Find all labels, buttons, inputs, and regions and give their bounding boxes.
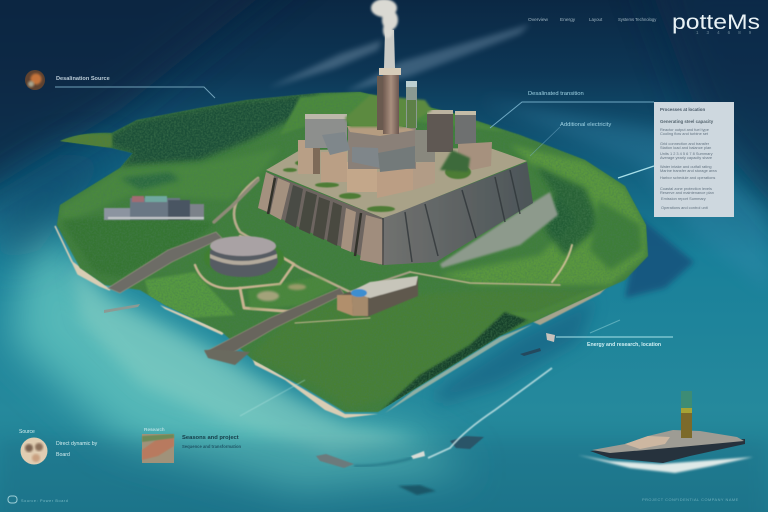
- panel text block: Units 1 2 3 4 5 6 7 8 Summary: [660, 151, 713, 156]
- callout: upper left: [25, 70, 110, 90]
- plant base wall right: [383, 162, 533, 265]
- deck greenery: [283, 160, 471, 212]
- panel text block: [660, 119, 717, 210]
- panel text block: Station load and balance plan: [660, 145, 711, 150]
- callout: lower left picture card: Sequence and transformation: [182, 444, 242, 449]
- callout: upper right labels: Additional electricity: [560, 122, 611, 128]
- island landmass: [57, 92, 648, 412]
- main power plant: [258, 0, 558, 268]
- panel text block: Water intake and outfall rating: [660, 164, 712, 169]
- icon: portrait circle: [20, 438, 48, 464]
- callout: lower left portrait: Direct dynamic by: [56, 441, 98, 447]
- panel text block: Average yearly capacity share: [660, 155, 712, 160]
- top navigation labels: [528, 17, 657, 23]
- bridge causeways: [108, 232, 222, 293]
- callout: lower left portrait: Board: [56, 452, 70, 458]
- ship tower: [681, 391, 692, 413]
- footer credit right: PROJECT CONFIDENTIAL COMPANY NAME: [642, 497, 739, 502]
- west meadow: [63, 218, 209, 276]
- footer left credit: [8, 496, 68, 503]
- ship with tower: [578, 391, 753, 473]
- ship hull: [590, 439, 745, 463]
- top navigation labels: Layout: [589, 17, 603, 22]
- footer left credit: Source: Power Board: [21, 499, 68, 503]
- lower forest: [250, 290, 590, 408]
- title: potteMs: [672, 11, 760, 34]
- coastal sand: [55, 226, 607, 418]
- callout: sea label: Energy and research, location: [587, 342, 661, 348]
- callout: upper right labels: [528, 91, 611, 128]
- plant deck: [266, 148, 527, 218]
- callout: upper left: Desalination Source: [56, 76, 110, 82]
- top navigation labels: Energy: [560, 17, 576, 23]
- panel text block: Emission report Summary: [661, 196, 706, 201]
- icon: footer badge: [8, 496, 17, 503]
- panel text block: Generating steel capacity: [660, 119, 714, 124]
- icon: upper left medallion: [25, 70, 45, 90]
- panel heading: Processes at location: [660, 107, 705, 112]
- picture thumbnail: [142, 434, 174, 463]
- panel text block: Reserve and maintenance plan: [660, 190, 714, 195]
- callout: lower left picture card: Seasons and project: [182, 435, 239, 441]
- south building with pool: [337, 276, 418, 317]
- panel: specifications: [654, 102, 734, 217]
- plant tower blocks: [298, 95, 492, 198]
- south pier and boats: [204, 320, 620, 495]
- island: [50, 85, 660, 420]
- panel text block: Cooling flow and turbine set: [660, 131, 709, 136]
- panel text block: Grid connection and transfer: [660, 141, 710, 146]
- panel text block: Operations and control unit: [661, 205, 709, 210]
- small plaza patches: [248, 276, 335, 310]
- ship wake: [578, 455, 753, 473]
- green texture: [50, 85, 660, 420]
- roads: [195, 178, 572, 323]
- top navigation labels: Systems Technology: [618, 17, 657, 22]
- forest shading north: [110, 93, 320, 168]
- callout: upper right labels: Desalinated transition: [528, 91, 584, 97]
- panel text block: Reactor output and fuel type: [660, 127, 709, 132]
- round domed building: [204, 236, 284, 277]
- callout: lower left portrait: [19, 429, 98, 464]
- smoke trail across the sky: [268, 24, 530, 92]
- panel text block: Marine transfer and storage area: [660, 168, 717, 173]
- west building: [104, 196, 204, 220]
- plant forecourt: [440, 192, 558, 268]
- connector lines: [55, 87, 673, 337]
- plant base wall left: [258, 172, 384, 265]
- callout: lower left portrait: Source: [19, 429, 35, 435]
- top navigation labels: Overview: [528, 17, 549, 23]
- callout: lower left picture card: Research: [144, 427, 165, 433]
- panel text block: Coastal zone protection levels: [660, 186, 712, 191]
- meadow east: [440, 145, 646, 285]
- smoke plume: [371, 0, 398, 38]
- title: 1 3 4 6 8 9: [696, 30, 755, 35]
- callout: lower left picture card: [142, 427, 242, 463]
- cooling stacks: [377, 30, 417, 134]
- panel text block: Harbor schedule and operations: [660, 175, 715, 180]
